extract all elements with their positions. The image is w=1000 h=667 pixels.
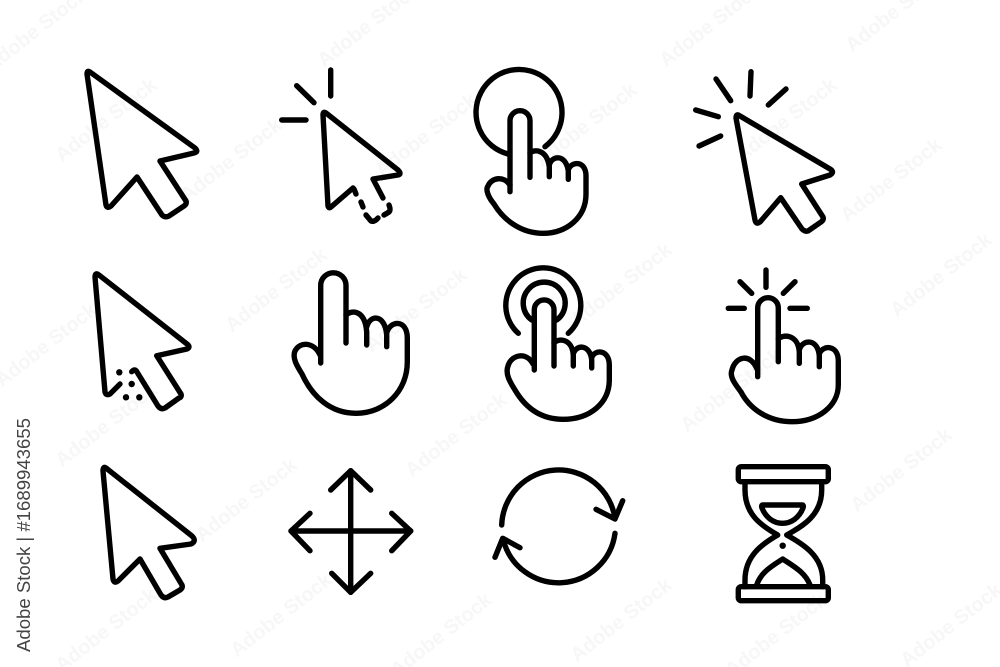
icon: pointing hand bbox=[294, 273, 407, 413]
icon: cursor with dotted tail bbox=[95, 274, 189, 409]
watermark pattern: Adobe Stock bbox=[731, 73, 842, 167]
watermark pattern: Adobe Stock bbox=[176, 113, 287, 207]
watermark pattern: Adobe Stock bbox=[361, 263, 472, 357]
icon: four-way move arrows bbox=[291, 471, 411, 592]
watermark pattern: Adobe Stock bbox=[51, 378, 162, 472]
icon: refresh arrows bbox=[495, 470, 623, 583]
stock image id caption: Adobe Stock | #1689943655 bbox=[14, 418, 34, 652]
watermark pattern: Adobe Stock bbox=[566, 573, 677, 667]
icon: hand with concentric touch rings bbox=[506, 268, 609, 419]
watermark pattern: Adobe Stock bbox=[401, 388, 512, 482]
watermark pattern: Adobe Stock bbox=[221, 243, 332, 337]
icon: clicking cursor with dashed tail bbox=[282, 70, 400, 221]
watermark pattern: Adobe Stock bbox=[676, 343, 787, 437]
icon: cursor with five click rays bbox=[696, 72, 832, 231]
icon: hand touching circle bbox=[476, 69, 586, 233]
icon: hourglass bbox=[738, 467, 828, 601]
watermark pattern: Adobe Stock bbox=[846, 423, 957, 517]
watermark pattern: Adobe Stock bbox=[191, 453, 302, 547]
icon: arrow cursor bottom row bbox=[103, 467, 194, 598]
icon: large arrow cursor bbox=[87, 71, 197, 217]
watermark pattern: Adobe Stock bbox=[371, 88, 482, 182]
watermark pattern: Adobe Stock bbox=[226, 568, 337, 662]
watermark pattern: Adobe Stock bbox=[836, 133, 947, 227]
watermark pattern: Adobe Stock bbox=[531, 78, 642, 172]
watermark pattern: Adobe Stock bbox=[886, 228, 997, 322]
watermark pattern: Adobe Stock bbox=[51, 73, 162, 167]
watermark pattern: Adobe Stock bbox=[566, 238, 677, 332]
icon: hand with click rays bbox=[728, 270, 838, 422]
